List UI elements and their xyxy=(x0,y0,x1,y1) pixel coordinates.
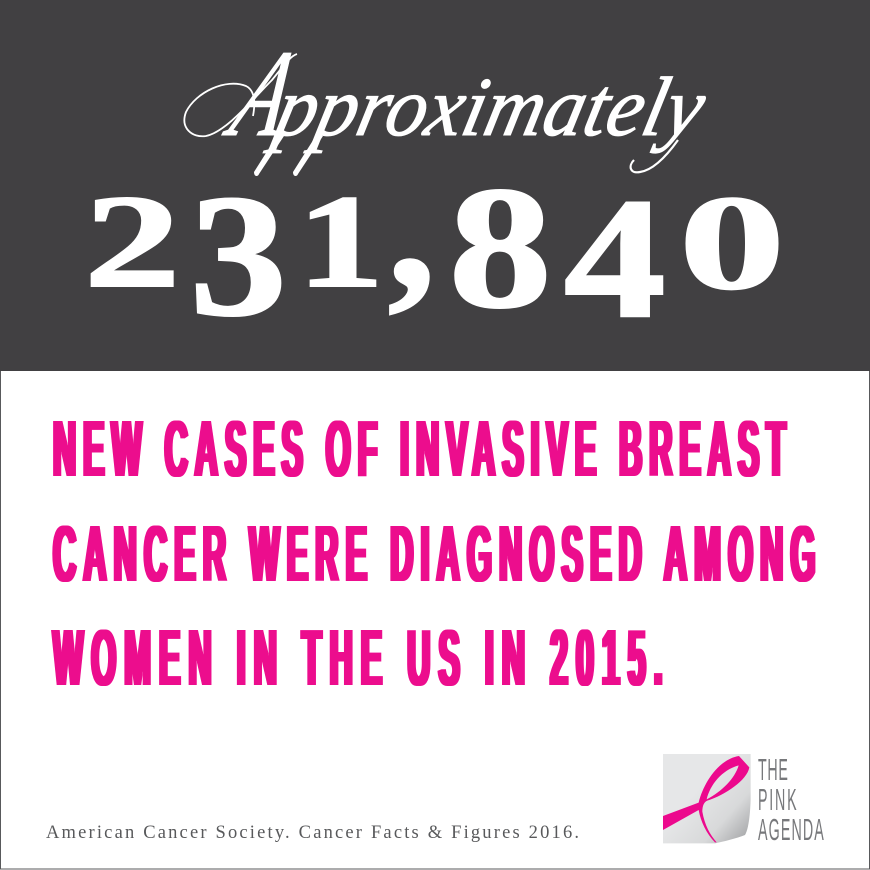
headline: pink statement: WOMEN IN THE US IN 2015. xyxy=(53,613,663,702)
big number: 231,840: 2 xyxy=(84,167,180,315)
source citation: American Cancer Society. Cancer Facts & Figures 2016. xyxy=(46,823,579,843)
big number: 231,840: 8 xyxy=(449,152,551,344)
logo wordmark: PINK xyxy=(758,783,797,818)
script heading: Approximately: pproximately xyxy=(263,61,714,154)
headline: pink statement: NEW CASES OF INVASIVE BREAST xyxy=(53,404,786,493)
big number: 231,840: , xyxy=(388,126,435,326)
icon: pink ribbon on curled page xyxy=(663,754,751,843)
big number: 231,840: 0 xyxy=(679,169,785,318)
big number: 231,840: 3 xyxy=(190,159,287,352)
big number: 231,840: 1 xyxy=(297,168,384,315)
headline: pink statement: CANCER WERE DIAGNOSED AMONG xyxy=(53,509,815,598)
logo wordmark: AGENDA xyxy=(758,813,824,848)
big number: 231,840 xyxy=(84,126,785,353)
script heading: Approximately: A xyxy=(212,24,317,162)
script heading: Approximately xyxy=(184,24,714,176)
logo wordmark xyxy=(758,753,824,848)
headline: pink statement xyxy=(53,404,815,702)
big number: 231,840: 4 xyxy=(564,162,665,353)
logo wordmark: THE xyxy=(758,753,788,788)
logo: The Pink Agenda xyxy=(663,753,824,848)
panel: dark header xyxy=(0,0,870,371)
